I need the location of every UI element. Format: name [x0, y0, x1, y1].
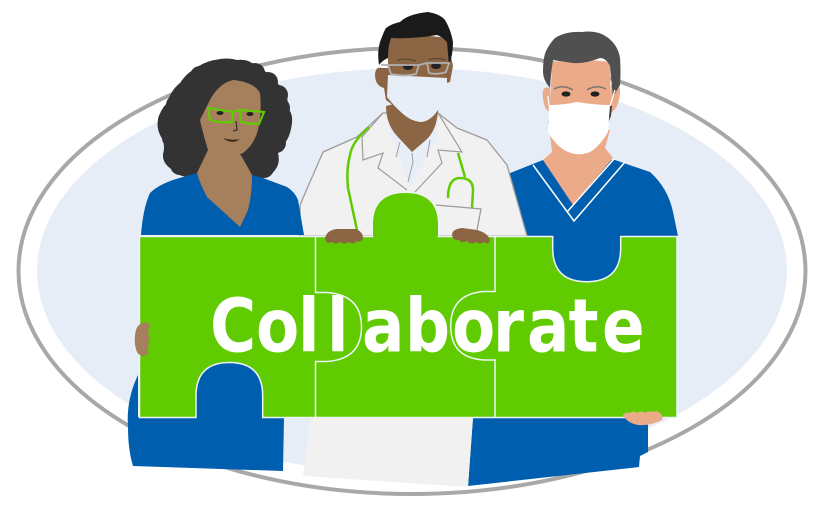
puzzle: piece seams — [316, 236, 495, 418]
puzzle: green pieces — [140, 193, 677, 418]
icon: doctor left hand — [325, 229, 363, 244]
icon: man hand — [623, 411, 663, 425]
icon: doctor right hand — [452, 228, 490, 244]
icon: stethoscope — [347, 127, 473, 230]
icon: green glasses — [208, 108, 264, 124]
figure: doctor in white coat — [300, 12, 527, 236]
figure: woman with green glasses — [141, 58, 304, 235]
figure: man with white mask — [505, 32, 678, 290]
figure: doctor lower coat — [303, 417, 473, 487]
icon: woman hand — [135, 323, 150, 356]
title: Collaborate — [210, 284, 645, 370]
figure: woman lower body — [128, 355, 284, 471]
figure: man lower body — [468, 418, 648, 486]
coat pocket — [436, 205, 481, 230]
